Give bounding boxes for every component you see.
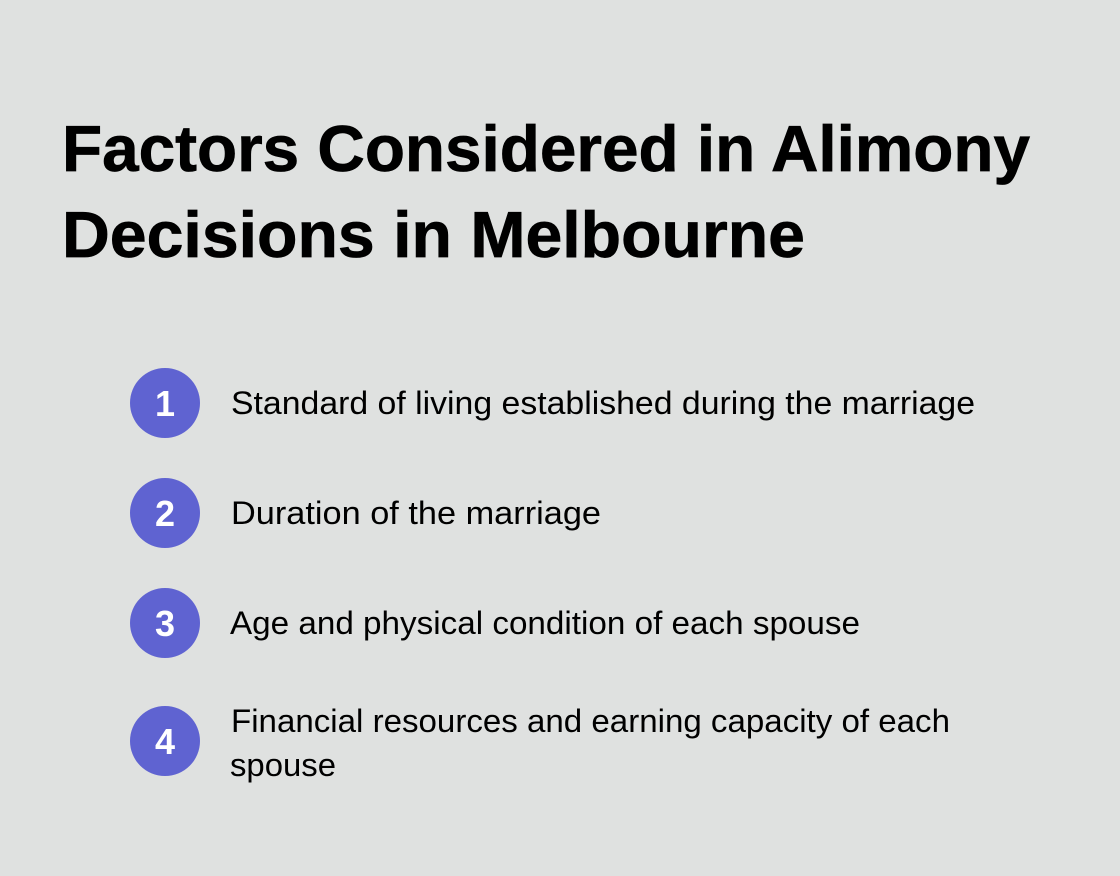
list item 4: 4 [155,721,175,762]
title: Decisions in Melbourne [62,198,805,271]
list item 4: Financial resources and earning capacity of each [231,703,950,739]
title [62,112,1030,271]
list item 1: Standard of living established during the marriage [231,385,975,421]
title: Factors Considered in Alimony [62,112,1030,185]
list item 3: 3 [155,603,175,644]
list item 4 [130,703,950,783]
list item 2: 2 [155,493,175,534]
list item 2 [130,478,601,548]
list item 4: spouse [230,747,336,783]
list item 3: Age and physical condition of each spouse [230,605,860,641]
list item 2: Duration of the marriage [231,495,601,531]
list of factors [130,368,975,783]
list item 1: 1 [155,383,175,424]
list item 1 [130,368,975,438]
list item 3 [130,588,860,658]
